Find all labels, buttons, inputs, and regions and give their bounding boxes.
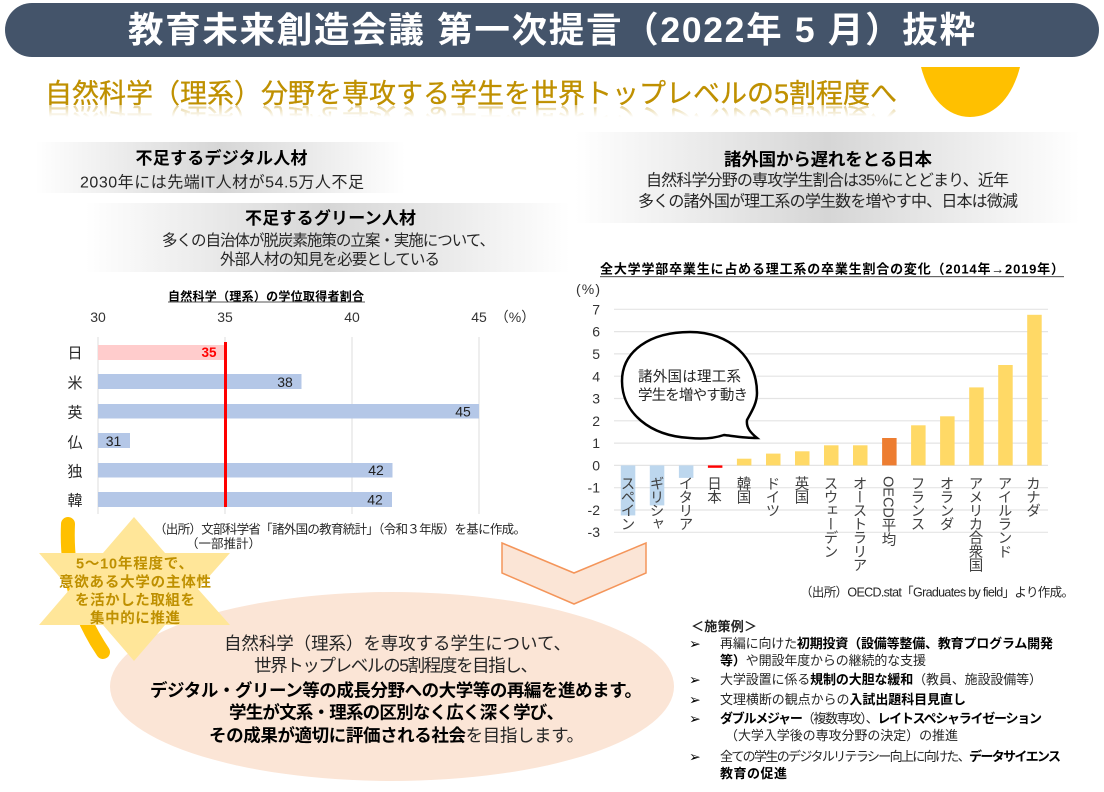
country labels: オランダ bbox=[938, 476, 954, 532]
panel: green talent shortage: 多くの自治体が脱炭素施策の立案・実施について、 bbox=[162, 232, 495, 250]
list item 4 bbox=[689, 711, 1042, 743]
value labels: 35 bbox=[201, 345, 217, 360]
star callout: timeframe: 5～10年程度で、 bbox=[76, 554, 193, 572]
chart title: 自然科学（理系）の学位取得者割合 bbox=[168, 288, 364, 304]
country labels: 米 bbox=[67, 375, 83, 392]
speech bubble callout: 諸外国は理工系 bbox=[638, 368, 741, 386]
y axis labels: 1 bbox=[592, 435, 600, 451]
y axis labels: -3 bbox=[588, 524, 600, 540]
list heading: ＜施策例＞ bbox=[691, 619, 757, 634]
panel: conclusion ellipse: 世界トップレベルの5割程度を目指し、 bbox=[254, 656, 538, 676]
panel: green talent shortage bbox=[85, 203, 570, 272]
panel: green talent shortage: 外部人材の知見を必要としている bbox=[220, 250, 440, 268]
subtitle with reflection: 自然科学（理系）分野を専攻する学生を世界トップレベルの5割程度へ bbox=[45, 79, 897, 109]
list item 3: 文理横断の観点からの入試出題科目見直し bbox=[720, 692, 966, 707]
axis labels: 30 bbox=[90, 309, 106, 325]
list item 4: ➢ bbox=[689, 712, 701, 728]
star callout: timeframe bbox=[39, 517, 230, 661]
y axis labels: 5 bbox=[592, 346, 600, 362]
bars bbox=[98, 345, 479, 507]
arrow: chevron down bbox=[502, 543, 646, 604]
y axis labels: 3 bbox=[592, 390, 600, 406]
list item 2: 大学設置に係る規制の大胆な緩和（教員、施設設備等） bbox=[720, 672, 1042, 687]
source note: left chart bbox=[154, 522, 526, 551]
speech bubble callout: 学生を増やす動き bbox=[638, 387, 748, 404]
country labels bbox=[618, 475, 1040, 572]
value labels: 31 bbox=[106, 433, 121, 449]
icon: half sun bbox=[921, 67, 1020, 117]
panel: conclusion ellipse: その成果が適切に評価される社会を目指します。 bbox=[209, 726, 584, 746]
reference line: Japan 35 bbox=[224, 342, 227, 507]
list item 1 bbox=[689, 636, 1053, 668]
bars bbox=[621, 315, 1042, 515]
axis labels bbox=[90, 309, 535, 325]
list item 3: ➢ bbox=[689, 692, 701, 708]
list item 1: 等）や開設年度からの継続的な支援 bbox=[720, 653, 926, 668]
axis labels: 35 bbox=[217, 309, 233, 325]
source note: left chart: （出所）文部科学省「諸外国の教育統計」（令和３年版）を基に作成。 bbox=[154, 522, 526, 536]
country labels: カナダ bbox=[1024, 476, 1040, 518]
y axis labels: 0 bbox=[592, 458, 600, 474]
panel: digital talent shortage: 不足するデジタル人材 bbox=[136, 148, 308, 168]
panel: conclusion ellipse bbox=[110, 592, 674, 781]
y axis labels: 6 bbox=[592, 324, 600, 340]
panel: conclusion ellipse: 自然科学（理系）を専攻する学生について、 bbox=[224, 634, 571, 654]
list item 1: 再編に向けた初期投資（設備等整備、教育プログラム開発 bbox=[720, 636, 1053, 651]
country labels: オーストラリア bbox=[850, 476, 866, 571]
column chart: change in science graduates share bbox=[576, 262, 1064, 572]
list item 4: （大学入学後の専攻分野の決定）の推進 bbox=[725, 728, 958, 743]
panel: Japan falling behind bbox=[575, 132, 1080, 223]
panel: Japan falling behind: 諸外国から遅れをとる日本 bbox=[724, 150, 932, 170]
decorative arc behind star bbox=[68, 524, 103, 652]
list item 5: 全ての学生のデジタルリテラシー向上に向けた、データサイエンス bbox=[720, 749, 1061, 764]
panel: conclusion ellipse: 学生が文系・理系の区別なく広く深く学び、 bbox=[229, 702, 564, 722]
panel: Japan falling behind: 多くの諸外国が理工系の学生数を増やす中、日本は微減 bbox=[638, 192, 1018, 210]
country labels: 日 bbox=[67, 345, 83, 362]
country labels: フランス bbox=[908, 476, 924, 531]
star callout: timeframe: を活かした取組を bbox=[75, 592, 195, 609]
value labels: 42 bbox=[367, 492, 383, 508]
value labels: 38 bbox=[277, 374, 293, 390]
country labels: 英国 bbox=[792, 475, 809, 504]
list item 5: ➢ bbox=[689, 750, 701, 766]
y axis labels bbox=[576, 281, 600, 540]
value labels: 42 bbox=[368, 462, 384, 478]
list item 1: ➢ bbox=[689, 636, 701, 652]
list item 5 bbox=[689, 749, 1061, 781]
country labels: 独 bbox=[67, 464, 83, 480]
title banner: 教育未来創造会議 第一次提言（2022年 5 月）抜粋 bbox=[128, 10, 975, 50]
panel: Japan falling behind: 自然科学分野の専攻学生割合は35%にとどまり、近年 bbox=[646, 172, 1009, 190]
axis labels: 40 bbox=[344, 309, 360, 325]
y axis labels: 7 bbox=[592, 302, 600, 318]
list item 2: ➢ bbox=[689, 672, 701, 688]
panel: conclusion ellipse: デジタル・グリーン等の成長分野への大学等の再編を進めます。 bbox=[150, 680, 642, 700]
bar chart: natural science degree share bbox=[67, 288, 535, 514]
y axis labels: 4 bbox=[592, 368, 600, 384]
country labels: アイルランド bbox=[996, 476, 1012, 558]
panel: digital talent shortage bbox=[35, 142, 405, 193]
source note: right chart: （出所）OECD.stat「Graduates by field」より作成。 bbox=[800, 586, 1074, 600]
title banner bbox=[5, 3, 1099, 57]
list item 4: ダブルメジャー（複数専攻）、レイトスペシャライゼーション bbox=[720, 711, 1042, 726]
axis labels: 45 bbox=[471, 309, 487, 325]
value labels bbox=[106, 345, 471, 508]
list item 5: 教育の促進 bbox=[720, 766, 787, 781]
source note: left chart: （一部推計） bbox=[186, 536, 261, 551]
y axis labels: 2 bbox=[592, 413, 600, 429]
y axis labels: (%) bbox=[576, 281, 600, 297]
star callout: timeframe: 集中的に推進 bbox=[90, 609, 180, 627]
speech bubble callout bbox=[622, 332, 757, 439]
axis labels: （%） bbox=[495, 309, 535, 325]
country labels: 韓国 bbox=[734, 476, 751, 504]
country labels: スペイン bbox=[618, 476, 635, 530]
value labels: 45 bbox=[455, 404, 471, 420]
country labels: ドイツ bbox=[764, 476, 780, 517]
country labels: 日本 bbox=[705, 476, 721, 504]
country labels: スウェーデン bbox=[822, 476, 838, 558]
star callout: timeframe: 意欲ある大学の主体性 bbox=[59, 573, 211, 591]
chart title: 全大学学部卒業生に占める理工系の卒業生割合の変化（2014年→2019年） bbox=[600, 262, 1064, 276]
country labels: イタリア bbox=[676, 476, 692, 531]
country labels: 英 bbox=[67, 404, 83, 422]
list: policy examples bbox=[689, 619, 1061, 781]
country labels: 韓 bbox=[67, 492, 83, 510]
country labels: 仏 bbox=[67, 434, 83, 452]
y axis labels: -2 bbox=[588, 502, 600, 518]
country labels: OECD平均 bbox=[880, 476, 896, 548]
y axis labels: -1 bbox=[588, 480, 600, 496]
country labels: ギリシャ bbox=[648, 476, 664, 530]
country labels bbox=[67, 345, 83, 510]
panel: green talent shortage: 不足するグリーン人材 bbox=[245, 208, 416, 228]
panel: digital talent shortage: 2030年には先端IT人材が54.5万人不足 bbox=[80, 174, 364, 192]
country labels: アメリカ合衆国 bbox=[966, 476, 983, 572]
